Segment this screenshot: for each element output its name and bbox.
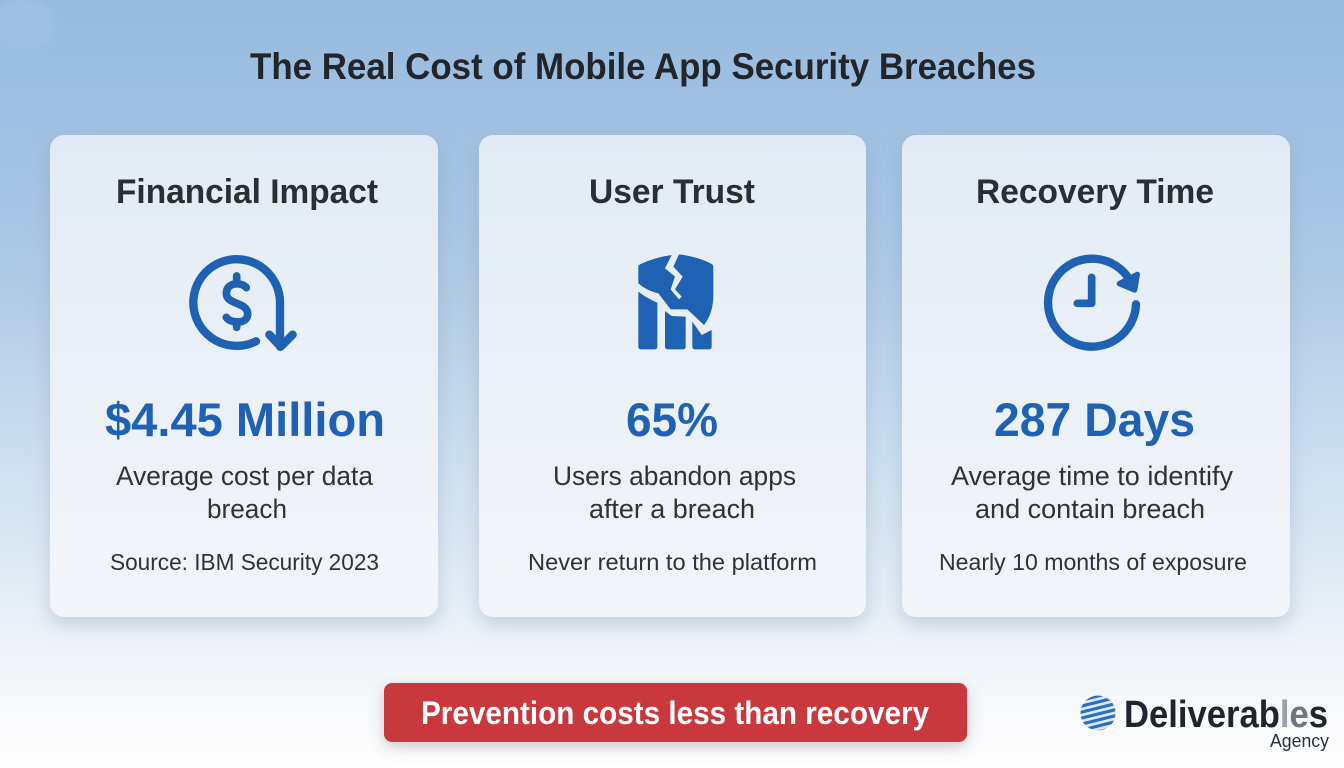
title: The Real Cost of Mobile App Security Breaches — [250, 46, 1036, 87]
description: average cost — [116, 461, 374, 524]
heading: user trust: User Trust — [589, 173, 755, 211]
description: average time — [951, 461, 1233, 524]
logo: Deliverables Agency — [1078, 691, 1329, 751]
description: average cost: breach — [207, 494, 287, 524]
logo subtitle: Agency — [1270, 731, 1329, 751]
panel: financial impact — [50, 135, 438, 617]
icon: striped globe — [1080, 696, 1116, 730]
stat: 287 Days: 287 Days — [994, 393, 1195, 446]
panel: recovery time — [902, 135, 1290, 617]
description: average cost: Average cost per data — [116, 461, 374, 491]
callout: prevention banner: Prevention costs less than recovery — [421, 695, 929, 731]
note: never return: Never return to the platform — [528, 549, 817, 575]
description: users abandon: after a breach — [589, 494, 755, 524]
description: average time: Average time to identify — [951, 461, 1233, 491]
panel: user trust — [479, 135, 866, 617]
description: users abandon: Users abandon apps — [553, 461, 796, 491]
icon: clock with circular arrow — [1048, 259, 1137, 347]
note: nearly 10 months: Nearly 10 months of exposure — [939, 549, 1247, 575]
logo wordmark: Deliverables — [1124, 694, 1328, 736]
icon: dollar with down arrow — [193, 259, 293, 347]
stat: $4.45 Million: $4.45 Million — [105, 393, 385, 446]
heading: recovery time: Recovery Time — [976, 173, 1214, 211]
source note: Source: IBM Security 2023 — [110, 549, 379, 575]
callout: prevention banner — [384, 683, 967, 742]
description: average time: and contain breach — [975, 494, 1205, 524]
description: users abandon — [553, 461, 796, 524]
stat: 65%: 65% — [626, 393, 718, 446]
icon: broken shield with falling bars — [638, 254, 713, 349]
heading: financial impact: Financial Impact — [116, 173, 378, 211]
